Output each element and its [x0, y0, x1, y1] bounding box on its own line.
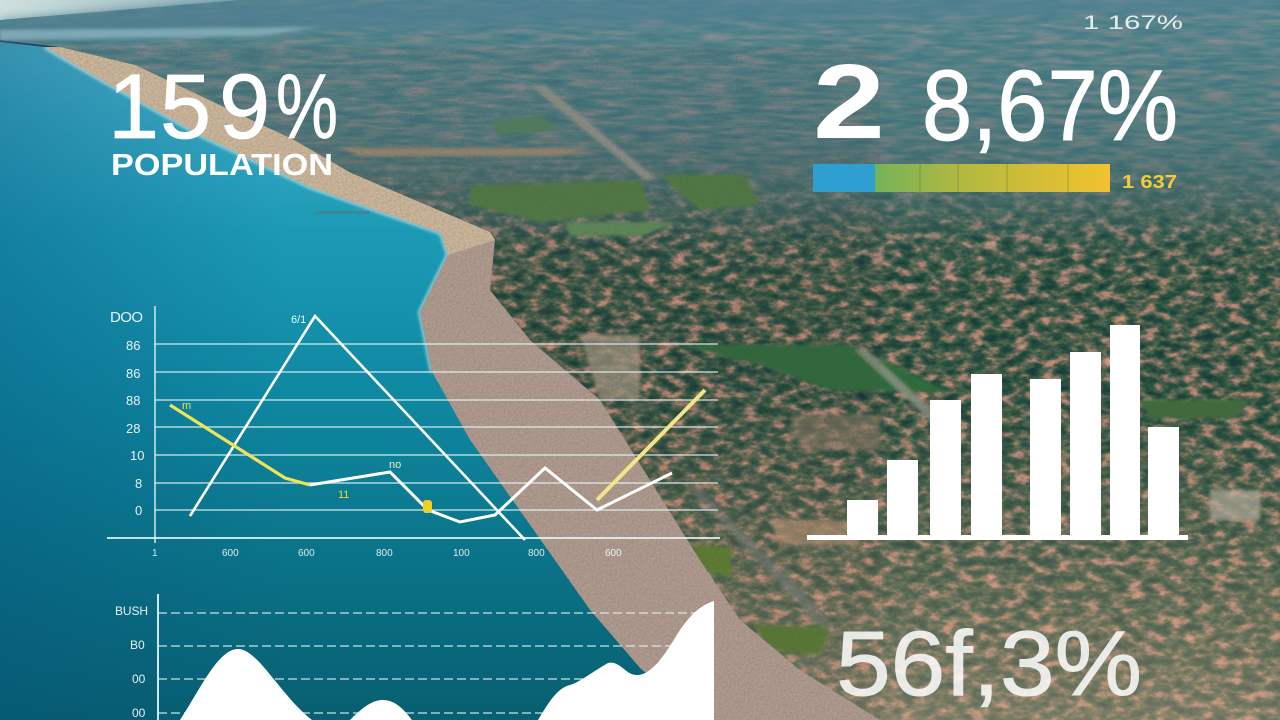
stat: population percentage	[108, 56, 338, 182]
x axis labels: 1	[152, 548, 158, 559]
bar value: 1 637	[1122, 172, 1177, 192]
progress bar	[813, 164, 1177, 192]
y axis labels: 00	[132, 672, 146, 686]
yellow marker	[423, 500, 432, 513]
x axis labels: 800	[376, 548, 393, 559]
point labels: m	[182, 400, 191, 412]
y axis labels	[110, 309, 144, 518]
point labels	[182, 314, 401, 501]
yellow rising line	[597, 390, 705, 500]
x axis labels: 800	[528, 548, 545, 559]
x axis labels: 600	[298, 548, 315, 559]
y axis labels: 88	[126, 393, 140, 408]
sky haze	[0, 0, 240, 20]
x axis labels: 600	[222, 548, 239, 559]
point labels: 6/1	[291, 314, 306, 326]
area chart	[115, 594, 714, 720]
white peak line	[190, 316, 525, 540]
big number: 56f,3%	[836, 613, 1142, 715]
beach	[45, 47, 880, 720]
label: population: POPULATION	[111, 147, 333, 182]
y axis labels: 86	[126, 366, 140, 381]
y axis labels: DOO	[110, 309, 143, 326]
stat: top right percentage	[813, 13, 1183, 162]
small caption: 1 167%	[1083, 13, 1183, 34]
y axis labels: B0	[130, 638, 145, 652]
y axis labels: 28	[126, 421, 140, 436]
y axis labels: 10	[130, 448, 144, 463]
y axis labels: 0	[135, 503, 142, 518]
white zigzag line	[310, 468, 672, 522]
x axis labels: 600	[605, 548, 622, 559]
y axis labels	[115, 604, 148, 720]
big digits: 159	[108, 56, 270, 158]
x axis labels: 100	[453, 548, 470, 559]
y axis labels: 86	[126, 338, 140, 353]
x axis labels	[152, 548, 622, 559]
point labels: no	[389, 459, 401, 471]
grid lines	[155, 344, 718, 510]
baseline	[807, 535, 1188, 540]
yellow line	[170, 405, 310, 485]
bar chart	[807, 325, 1188, 540]
distant ship	[316, 211, 370, 214]
sea	[0, 42, 646, 720]
dashed grid lines	[158, 613, 714, 713]
y axis labels: 8	[135, 476, 142, 491]
y axis labels: BUSH	[115, 604, 148, 618]
point labels: 11	[338, 489, 349, 501]
big digit: 2	[813, 43, 885, 161]
big number: 8,67%	[922, 50, 1178, 162]
bars	[847, 325, 1179, 537]
y axis labels: 00	[132, 706, 146, 720]
line chart	[107, 306, 720, 559]
white area shape	[180, 601, 714, 720]
percent sign: %	[276, 56, 338, 158]
